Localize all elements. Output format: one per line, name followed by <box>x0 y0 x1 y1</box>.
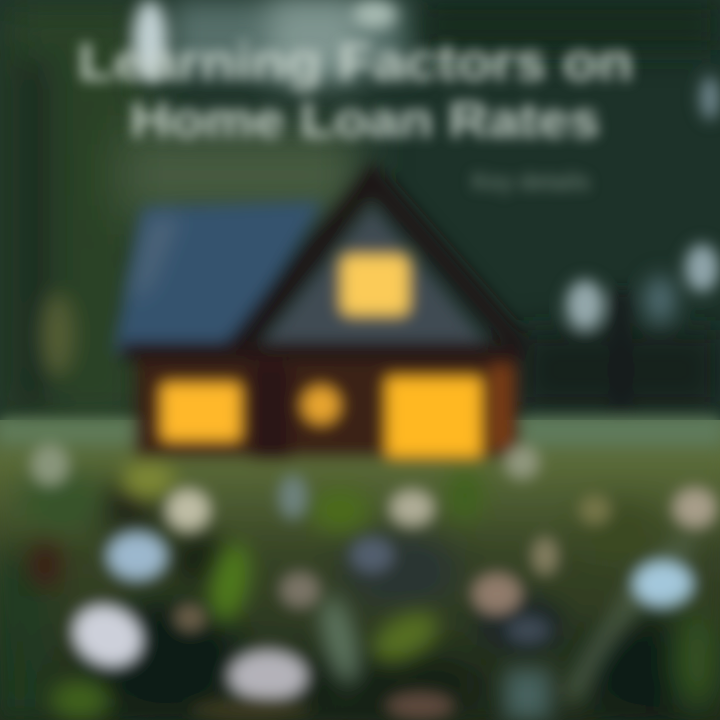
title <box>78 33 633 148</box>
right garage door <box>385 376 483 458</box>
title: Home Loan Rates <box>130 92 600 148</box>
lawn <box>0 418 720 720</box>
title: Learning Factors on <box>78 33 633 92</box>
lower storey <box>136 350 518 456</box>
left window <box>160 382 242 442</box>
gable wall <box>254 205 492 350</box>
subtitle: Key details <box>472 168 590 196</box>
forest background <box>0 0 720 430</box>
upper window <box>340 254 410 316</box>
roof: blue side panel <box>114 202 322 354</box>
centre round window <box>301 385 341 425</box>
house <box>114 178 522 458</box>
gable dark frame <box>235 178 520 352</box>
garden flowers <box>31 444 720 720</box>
